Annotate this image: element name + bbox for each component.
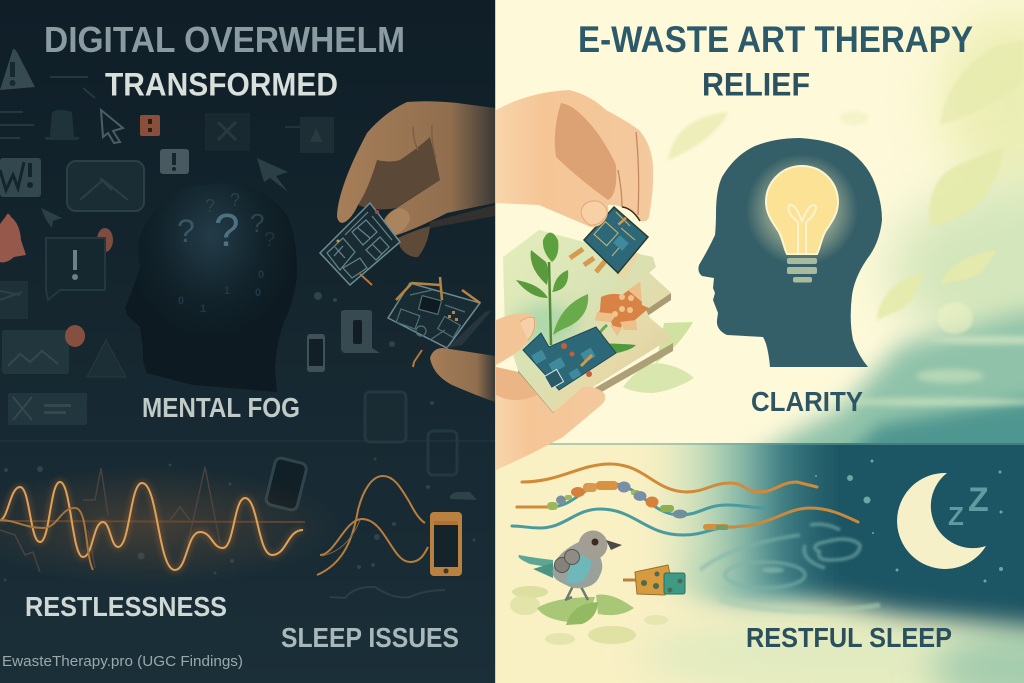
panel: restful sleep night scene [496,400,1024,683]
thumb nail [581,201,607,225]
question marks in head: ? [264,229,275,251]
subheading: relief: RELIEF [702,66,810,102]
icon: graph panel [2,330,69,374]
faint binary digits: 0 [255,287,261,299]
faint binary digits: 0 [258,269,264,281]
water ripples [700,524,880,611]
icon: faint warning box [285,117,334,153]
question marks in head: ? [230,190,240,210]
palm shadow [555,103,616,200]
head silhouette with question marks [125,184,297,392]
top half haze [668,10,1024,470]
label: restlessness: RESTLESSNESS [25,591,227,622]
ground leaves [510,586,668,645]
question marks in head: ? [214,204,240,256]
icon: red bell [0,214,26,262]
icon: alert triangle [0,49,35,90]
faint top-right phone stub [450,492,477,500]
source credit: EwasteTherapy.pro (UGC Findings) [2,653,243,670]
icon: exclamation box [160,149,189,174]
faint binary digits: 1 [224,285,230,297]
bulb glow [746,154,858,266]
icon: warning triangle outline [87,340,126,377]
faint binary digits [178,270,264,312]
chip held between fingers [570,207,648,280]
art piece on stone [503,207,673,420]
icon: dim envelope [0,281,28,319]
bird head [578,530,608,560]
icon: red dot [65,325,85,347]
icon: M! box [0,158,41,197]
circuit board on stone [523,327,616,390]
label: restful sleep: RESTFUL SLEEP [746,622,952,653]
finger crease [413,125,436,158]
restlessness waveform [0,466,308,576]
terracotta flower [595,282,649,336]
circuit chip two with orange wires [388,277,492,367]
icon: red pill [97,228,113,252]
faint dots [4,292,476,582]
icon: orange phone [430,512,462,576]
faint notification icons background [0,49,476,582]
icon: message lines [0,77,95,138]
index finger crease [618,132,639,215]
icon: speech bubble exclamation [46,238,105,300]
lower thumb from right [430,348,495,402]
lower hand supporting art [496,313,605,470]
icon: faint x box [205,114,250,141]
sleep issues wave and phone [317,476,477,598]
icon: phone [307,334,325,372]
icon: red alert tag [140,115,160,136]
bird tail [518,555,553,578]
stars [815,460,1003,582]
bird legs [565,584,588,600]
clarity head with lightbulb [698,138,882,367]
sleeping z letters: Z [948,501,964,531]
question marks in head: ? [250,208,264,238]
bird body [553,540,602,588]
label: sleep issues: SLEEP ISSUES [281,622,459,653]
circuit block sculpture [623,565,685,595]
sleeping z letters: Z [968,481,989,519]
heading: e-waste art therapy: E-WASTE ART THERAPY [578,19,973,60]
panel: digital overwhelm (dark left side) [0,0,495,683]
thumb nail [385,208,410,236]
icon: cursor arrow [101,110,123,143]
icon: faint bell [44,110,80,140]
icon: faint phones [265,392,457,511]
faint binary digits: 1 [200,303,206,315]
circuit chip one [320,203,400,285]
bird beak [606,540,622,550]
fingers shadow below chip [398,226,430,257]
recycled robin bird figure [510,530,668,645]
icon: small arrow [41,208,62,228]
icon: dim cursor [257,158,288,192]
stone base side [518,343,673,420]
panel: e-waste art therapy (light right side) [496,0,1024,683]
icon: phone badge [341,310,380,353]
question marks in head: ? [177,213,195,249]
lightbulb [766,166,838,282]
hand shadow cavity [358,137,440,209]
icon: x label box [8,393,87,425]
sleeping z letters [948,481,989,531]
bird wing panels [566,554,592,584]
beads [547,481,729,530]
green plant [516,232,636,356]
label: clarity: CLARITY [751,386,863,417]
centre divider [495,0,497,683]
hand holding circuit chip [337,101,495,257]
woven wire waves with beads [512,464,858,535]
faint underline squiggle [330,587,445,598]
question marks in head: ? [205,196,215,216]
upper hand pinching chip [496,90,653,227]
drifting leaves [668,40,1024,334]
icon: mail envelope [67,161,144,211]
stone base top [503,230,673,412]
heading: digital overwhelm: DIGITAL OVERWHELM [44,19,405,60]
label: mental fog: MENTAL FOG [142,392,300,423]
faint binary digits: 0 [178,295,184,307]
crescent moon [897,473,986,569]
upper leaves behind art [623,322,694,393]
question marks in head [178,193,274,246]
subheading: transformed: TRANSFORMED [105,66,338,102]
